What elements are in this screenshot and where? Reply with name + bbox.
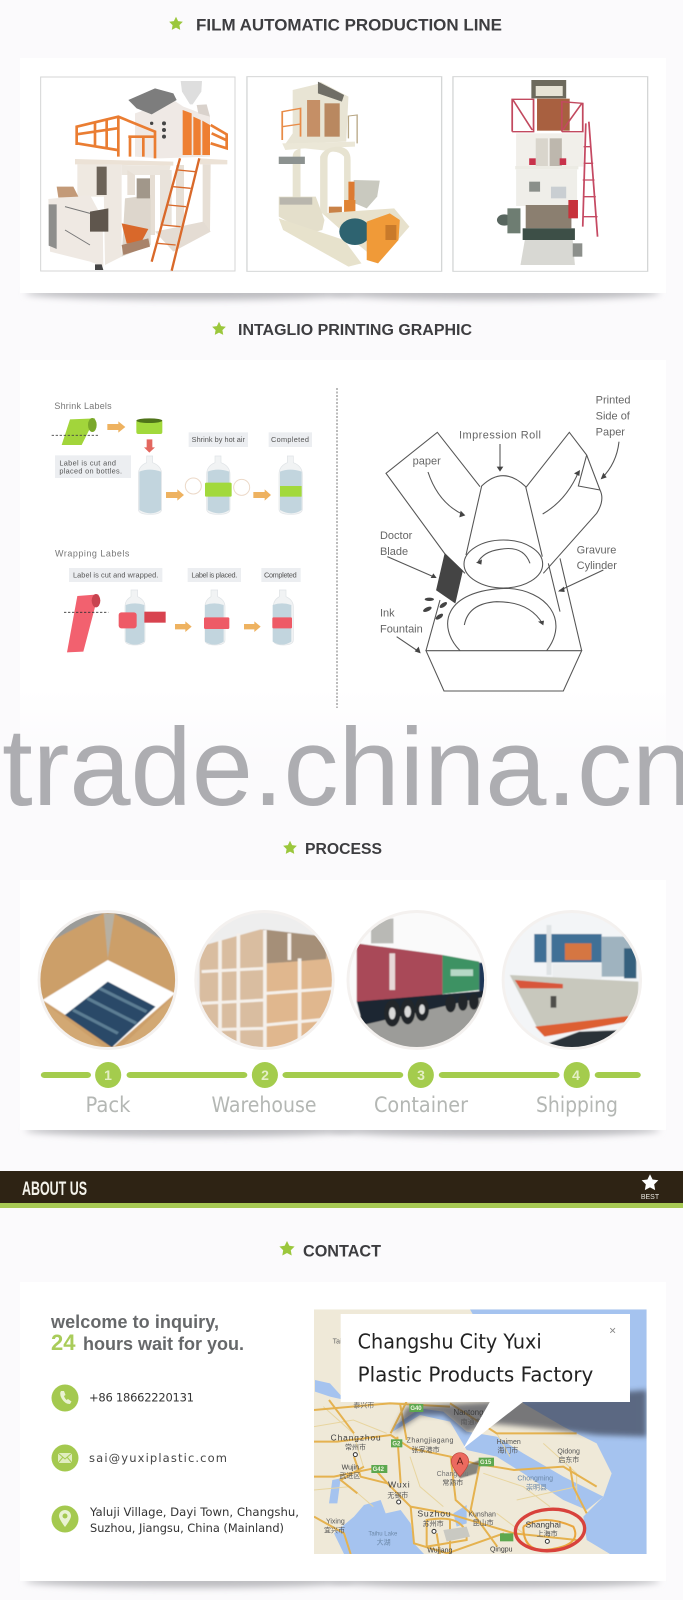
photo: machine one — [41, 77, 235, 271]
email: sai@yuxiplastic.com — [89, 1451, 227, 1465]
place names: 常州市 — [345, 1442, 366, 1451]
contact headline: hours wait for you. — [83, 1334, 244, 1354]
shadow of info window — [393, 1390, 647, 1437]
info window: × — [609, 1324, 616, 1338]
place names: Qidong — [557, 1448, 580, 1455]
place names: 上海市 — [537, 1529, 558, 1538]
photo circles — [36, 910, 642, 1088]
place names: 常熟市 — [442, 1478, 463, 1487]
roads — [314, 1400, 597, 1554]
place names: 泰兴市 — [353, 1400, 374, 1409]
place names: 苏州市 — [423, 1519, 444, 1528]
progress line with numbered steps — [44, 1062, 637, 1088]
step labels: Warehouse — [212, 1093, 316, 1117]
shrink labels row: Completed — [271, 435, 309, 444]
place names: Wujiang — [427, 1548, 453, 1555]
place names: 宜兴市 — [324, 1525, 345, 1534]
place names: Haimen — [497, 1439, 521, 1446]
place names: Wujin — [342, 1464, 359, 1471]
email — [52, 1444, 227, 1472]
place names: Nantong — [453, 1408, 484, 1417]
place names — [324, 1338, 580, 1555]
map: G2 — [392, 1441, 401, 1447]
address: Suzhou, Jiangsu, China (Mainland) — [90, 1521, 284, 1535]
diagram: gravure printing press: Doctor — [380, 530, 413, 542]
contact headline: 24 — [51, 1330, 76, 1355]
panel: process — [25, 910, 660, 1140]
wrapping labels row: Label is placed. — [191, 570, 237, 579]
address: Yaluji Village, Dayi Town, Changshu, — [89, 1505, 299, 1519]
place names: Kunshan — [468, 1512, 496, 1519]
step numbers: 4 — [572, 1067, 580, 1083]
sea and waterways — [315, 1309, 647, 1554]
place names: 无锡市 — [387, 1490, 408, 1499]
place names: 启东市 — [558, 1455, 579, 1464]
route badges — [371, 1404, 513, 1541]
diagram: gravure printing press: Ink — [380, 608, 395, 620]
diagram: gravure printing press: Blade — [380, 546, 408, 558]
location marker A — [451, 1453, 469, 1477]
address — [52, 1505, 299, 1535]
step numbers: 3 — [417, 1067, 425, 1083]
step labels: Container — [374, 1093, 468, 1117]
heading: film automatic production line: FILM AUTOMATIC PRODUCTION LINE — [196, 16, 502, 34]
map: G40 — [410, 1406, 422, 1412]
photo: machine two — [247, 77, 442, 271]
place names: 武进区 — [339, 1471, 360, 1480]
diagram: gravure printing press: Gravure — [577, 544, 616, 556]
heading: contact: CONTACT — [303, 1242, 382, 1260]
place names: Changzhou — [331, 1433, 381, 1443]
diagram: gravure printing press — [380, 395, 631, 691]
shrink labels row — [52, 401, 312, 514]
place names: Wuxi — [388, 1480, 410, 1490]
circle: container — [347, 910, 487, 1050]
map: G15 — [480, 1460, 492, 1466]
place names: 大湖 — [377, 1538, 391, 1547]
place names: Taihu Lake — [368, 1531, 398, 1537]
diagram: gravure printing press: Paper — [596, 427, 625, 439]
step labels: Pack — [86, 1093, 131, 1117]
map: G42 — [373, 1467, 385, 1473]
location marker A: A — [457, 1457, 464, 1468]
place names: Shanghai — [526, 1519, 561, 1529]
diagram: shrink and wrapping labels — [52, 401, 312, 652]
diagram: gravure printing press: paper — [413, 455, 441, 467]
map — [314, 1309, 647, 1555]
wrapping labels row: Label is cut and wrapped. — [73, 570, 158, 579]
step labels — [86, 1093, 618, 1117]
panel: intaglio printing — [20, 360, 666, 770]
place names: 南通市 — [461, 1417, 482, 1426]
wrapping labels row: Wrapping Labels — [55, 549, 130, 559]
heading: intaglio printing graphic: INTAGLIO PRINTING GRAPHIC — [238, 322, 472, 339]
shrink labels row: Label is cut and — [59, 458, 116, 467]
diagram: gravure printing press: Fountain — [380, 623, 423, 635]
contact headline — [50, 1312, 244, 1355]
place names: Qingpu — [490, 1547, 513, 1554]
place names: 海门市 — [497, 1446, 518, 1455]
place names: 昆山市 — [473, 1518, 494, 1527]
circle: shipping — [502, 910, 642, 1050]
place names: Suzhou — [417, 1509, 451, 1519]
place names: Zhangjiagang — [407, 1438, 453, 1445]
diagram: gravure printing press: Impression Roll — [459, 430, 541, 442]
photo: machine three — [453, 77, 648, 271]
info window: Changshu City Yuxi — [358, 1329, 542, 1353]
banner: about us — [0, 1171, 683, 1208]
minor roads — [314, 1407, 577, 1533]
info window: Plastic Products Factory — [358, 1363, 593, 1387]
shrink labels row: placed on bottles. — [59, 466, 122, 475]
banner: about us: BEST — [641, 1194, 660, 1201]
diagram: gravure printing press: Side of — [596, 410, 631, 422]
banner: about us: ABOUT US — [22, 1179, 87, 1200]
place names: Yixing — [326, 1518, 345, 1525]
info window — [341, 1314, 630, 1448]
step numbers: 1 — [104, 1067, 112, 1083]
panel: production line machines — [20, 58, 666, 300]
step numbers — [104, 1067, 580, 1083]
wrapping labels row — [55, 549, 301, 652]
heading: process: PROCESS — [305, 841, 382, 858]
phone: +86 18662220131 — [89, 1390, 194, 1404]
phone — [52, 1384, 194, 1412]
place names: 张家港市 — [412, 1445, 440, 1454]
step labels: Shipping — [536, 1093, 618, 1117]
shrink labels row: Shrink by hot air — [192, 435, 246, 444]
place names: Changshu — [437, 1471, 469, 1478]
shrink labels row: Shrink Labels — [54, 401, 112, 411]
place names: 崇明县 — [526, 1483, 547, 1491]
circle: warehouse — [194, 910, 335, 1050]
wrapping labels row: Completed — [264, 570, 297, 579]
Shanghai red circle — [514, 1507, 586, 1553]
diagram: gravure printing press: Printed — [596, 395, 630, 407]
panel: contact — [20, 1282, 666, 1588]
circle: pack — [36, 910, 179, 1050]
contact headline: welcome to inquiry, — [50, 1312, 219, 1332]
place names: Tai — [333, 1338, 342, 1345]
place names: Chongming — [517, 1476, 553, 1483]
diagram: gravure printing press: Cylinder — [577, 560, 617, 572]
step numbers: 2 — [261, 1067, 269, 1083]
